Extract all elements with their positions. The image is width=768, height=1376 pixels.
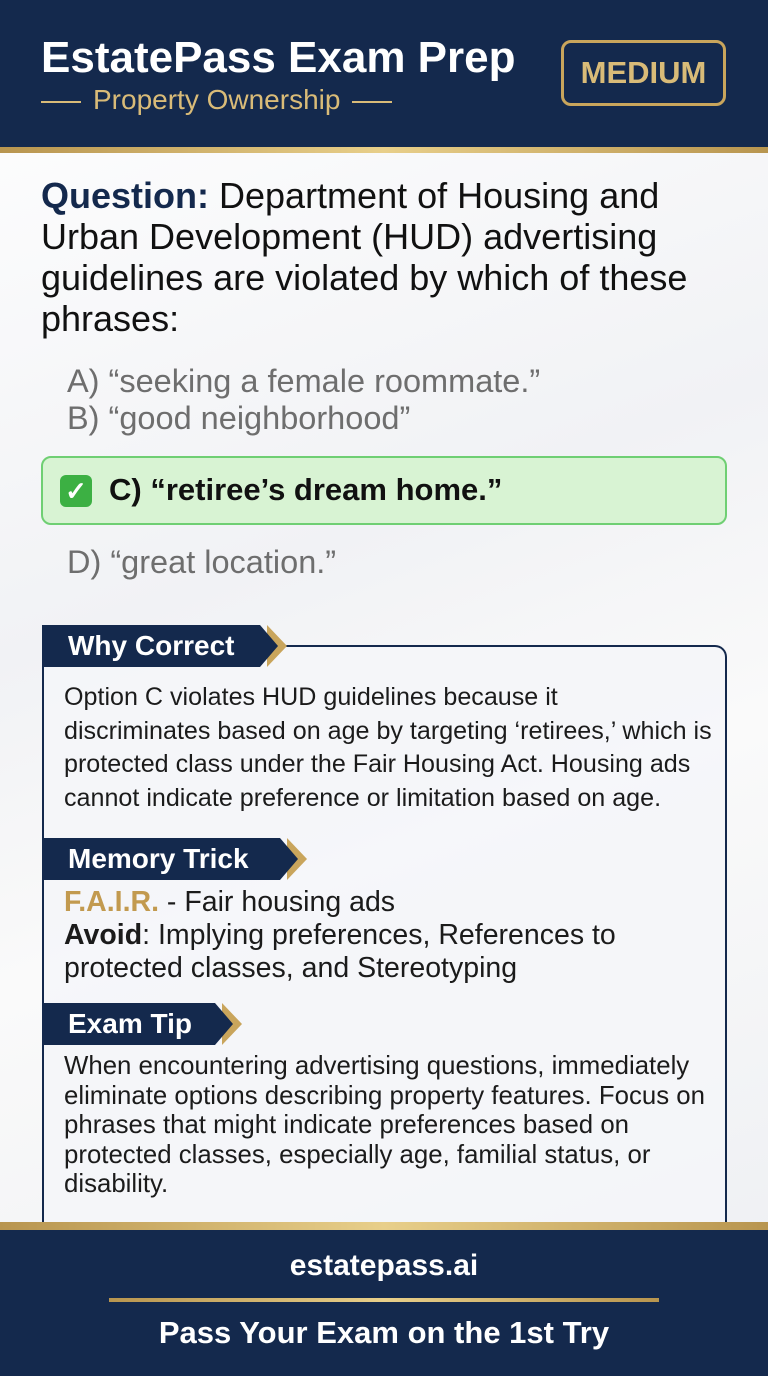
- heading: memory trick: Memory Trick: [68, 843, 249, 874]
- text: why correct: [64, 683, 712, 812]
- footer url: estatepass.ai: [290, 1249, 478, 1282]
- text: memory trick: Avoid: Implying preferences, References to: [64, 919, 616, 951]
- badge: difficulty: [561, 40, 726, 106]
- text: exam tip: disability.: [64, 1170, 168, 1198]
- text: why correct: discriminates based on age by targeting ‘retirees,’ which is: [64, 716, 712, 744]
- heading: memory trick: [44, 838, 307, 880]
- text: exam tip: eliminate options describing property features. Focus on: [64, 1082, 705, 1110]
- icon: check: [60, 475, 92, 507]
- option D: D) “great location.”: [67, 544, 336, 580]
- panel: explanation: [42, 645, 727, 1235]
- heading: exam tip: Exam Tip: [68, 1008, 192, 1039]
- text: exam tip: protected classes, especially age, familial status, or: [64, 1140, 650, 1168]
- header: [0, 0, 768, 147]
- text: exam tip: phrases that might indicate preferences based on: [64, 1111, 629, 1139]
- text: exam tip: When encountering advertising questions, immediately: [64, 1052, 689, 1080]
- text: memory trick: F.A.I.R. - Fair housing ads: [64, 886, 395, 918]
- title: EstatePass Exam Prep: [41, 33, 516, 82]
- text: why correct: cannot indicate preference or limitation based on age.: [64, 784, 661, 812]
- footer: [0, 1222, 768, 1376]
- heading: exam tip: [44, 1003, 242, 1045]
- option C correct: [41, 456, 727, 525]
- option C correct: C) “retiree’s dream home.”: [109, 472, 502, 507]
- text: why correct: protected class under the Fair Housing Act. Housing ads: [64, 750, 690, 778]
- footer tagline: Pass Your Exam on the 1st Try: [159, 1315, 609, 1350]
- icon: check: ✓: [65, 476, 87, 506]
- text: why correct: Option C violates HUD guidelines because it: [64, 683, 558, 711]
- option B: B) “good neighborhood”: [67, 400, 410, 436]
- heading: why correct: Why Correct: [68, 630, 234, 661]
- subtitle: Property Ownership: [93, 84, 340, 115]
- text: memory trick: protected classes, and Stereotyping: [64, 952, 517, 984]
- option A: A) “seeking a female roommate.”: [67, 363, 540, 399]
- question: [41, 175, 687, 339]
- badge: difficulty: MEDIUM: [581, 55, 706, 90]
- text: memory trick: [64, 886, 616, 984]
- question: Question: Department of Housing and: [41, 175, 659, 216]
- heading: why correct: [42, 625, 287, 667]
- question: guidelines are violated by which of these: [41, 257, 687, 298]
- question: Urban Development (HUD) advertising: [41, 216, 657, 257]
- text: exam tip: [64, 1052, 705, 1198]
- question: phrases:: [41, 298, 179, 339]
